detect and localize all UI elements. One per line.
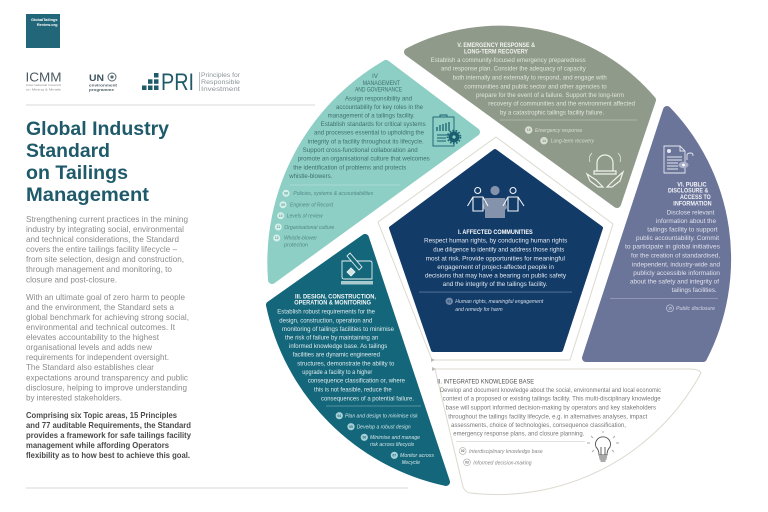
panel: III design, construction, operation and monitoring: upgrade a facility to a higher xyxy=(302,370,372,376)
icon: document with eye xyxy=(664,146,693,173)
intro paragraph 2: With an ultimate goal of zero harm to people xyxy=(26,293,185,302)
principle 01: and remedy for harm xyxy=(455,307,503,313)
panel: III design, construction, operation and monitoring xyxy=(270,238,446,482)
principle 15: Public disclosure xyxy=(676,306,715,312)
panel: IV management and governance: integrity of a facility throughout its lifecycle. xyxy=(308,139,424,145)
title: Global Industry xyxy=(26,118,169,140)
panel: III design, construction, operation and monitoring: design, construction, operation and xyxy=(279,318,372,324)
logo: UN environment programme: environment xyxy=(89,84,118,88)
intro paragraph 2 xyxy=(26,293,189,402)
panel: VI public disclosure and access to information: about the safety and integrity of xyxy=(630,280,719,286)
logo: UN environment programme: UN xyxy=(89,73,104,84)
intro paragraph 2: expectations around transparency and public xyxy=(26,373,188,382)
intro paragraph 2: The Standard also establishes clear xyxy=(26,363,154,372)
principle 11 xyxy=(275,224,334,231)
principle 13: 13 xyxy=(527,128,531,132)
panel: II integrated knowledge base: emergency response plans, and closure planning. xyxy=(453,432,585,438)
intro paragraph 1: covers the entire tailings facility lifecycle – xyxy=(26,245,177,254)
panel: IV management and governance: Assign responsibility and xyxy=(345,96,412,102)
panel: VI public disclosure and access to information: ACCESS TO xyxy=(680,195,711,201)
panel: II integrated knowledge base: throughout the tailings facility lifecycle, e.g. in alternatives analyses, impact xyxy=(448,414,648,420)
panel: II integrated knowledge base: base will support informed decision-making by operators and key stakeholders xyxy=(446,405,656,411)
principle 14 xyxy=(540,137,594,145)
panel: II integrated knowledge base xyxy=(432,367,701,495)
icon: alarm bell in hands xyxy=(587,153,623,187)
intro paragraph 3 (bold): and 77 auditable Requirements, the Standard xyxy=(26,421,191,430)
principle 06: Minimise and manage xyxy=(370,435,420,441)
icon: light bulb xyxy=(587,431,619,461)
panel: I affected communities: I. AFFECTED COMMUNITIES xyxy=(458,230,533,236)
panel: VI public disclosure and access to information: Disclose relevant xyxy=(667,210,715,216)
panel: III design, construction, operation and monitoring: consequences of a potential failure. xyxy=(321,396,414,402)
logo: Global Tailings Review xyxy=(26,14,60,48)
panel: I affected communities: decisions that may have a bearing on public safety xyxy=(425,273,566,279)
title: on Tailings xyxy=(26,162,128,184)
panel: IV management and governance: and processes essential to upholding the xyxy=(314,131,425,137)
logo: ICMM: International Council xyxy=(26,83,61,87)
principle 13 xyxy=(525,126,582,134)
principle 07: Monitor across xyxy=(400,453,434,459)
logo: ICMM: ICMM xyxy=(26,70,62,84)
principle 03: Informed decision-making xyxy=(473,460,532,466)
panel: I affected communities: most at risk. Provide opportunities for meaningful xyxy=(426,256,565,262)
panel: V emergency response and long-term recovery: both internally and externally to respond, and engage with xyxy=(453,75,607,81)
panel: IV management and governance: whistle-blowers. xyxy=(288,174,333,180)
logo: PRI: PRI xyxy=(161,69,194,96)
intro paragraph 1: and technical considerations, the Standard xyxy=(26,235,179,244)
intro paragraph 3 (bold): management while affording Operators xyxy=(26,441,169,450)
panel: VI public disclosure and access to information: to participate in global initiatives xyxy=(625,245,720,251)
panel: II integrated knowledge base: context of a proposed or existing tailings facility. This multi-disciplinary knowledge xyxy=(443,397,661,403)
panel: V emergency response and long-term recovery xyxy=(408,30,652,204)
principle 09: Engineer of Record xyxy=(290,203,334,209)
principle 01: Human rights, meaningful engagement xyxy=(455,299,544,305)
principle 08: 08 xyxy=(284,192,288,196)
principle 01: 01 xyxy=(448,300,451,304)
principle 06: risk across lifecycle xyxy=(370,442,414,448)
intro paragraph 2: and the environment, the Standard sets a xyxy=(26,303,174,312)
panel: III design, construction, operation and monitoring: consequence classification or, where xyxy=(308,379,406,385)
principle 03: 03 xyxy=(465,460,469,464)
principle 06 xyxy=(361,434,420,448)
principle 06: 06 xyxy=(363,436,366,440)
icon: three people xyxy=(468,186,524,218)
principle 04: 04 xyxy=(338,414,341,418)
principle 12: Whistle-blower xyxy=(284,236,317,242)
icon: clipboard with chart and gear xyxy=(433,115,460,146)
principle 11: 11 xyxy=(277,225,280,229)
panel: VI public disclosure and access to information: independent, industry-wide and xyxy=(632,262,720,268)
panel: V emergency response and long-term recovery: communities and public sector and other agencies to xyxy=(464,84,607,90)
principle 12: protection xyxy=(283,243,308,249)
panel: V emergency response and long-term recovery: V. EMERGENCY RESPONSE & xyxy=(457,43,536,49)
panel: V emergency response and long-term recovery: and response plan. Consider the adequacy of capacity xyxy=(441,67,586,73)
principle 15: 15 xyxy=(668,306,672,310)
principle 07: lifecycle xyxy=(402,460,420,466)
intro paragraph 1: closure and post-closure. xyxy=(26,275,117,284)
intro paragraph 3 (bold): provides a framework for safe tailings facility xyxy=(26,431,191,440)
panel: I affected communities: and the integrity of the tailings facility. xyxy=(443,282,548,288)
panel: III design, construction, operation and monitoring: the risk of failure by maintaining an xyxy=(285,335,378,341)
intro paragraph 2: elevates accountability to the highest xyxy=(26,333,160,342)
panel: VI public disclosure and access to information: DISCLOSURE & xyxy=(668,189,709,195)
principle 11: Organisational culture xyxy=(284,225,334,231)
intro paragraph 3 (bold) xyxy=(26,411,191,460)
principle 07: 07 xyxy=(393,454,396,458)
intro paragraph 2: organisational levels and adds new xyxy=(26,343,152,352)
panel: IV management and governance: Establish standards for critical systems xyxy=(321,122,426,128)
panel: V emergency response and long-term recovery: LONG-TERM RECOVERY xyxy=(464,50,528,56)
intro paragraph 2: requirements for independent oversight. xyxy=(26,353,169,362)
logo: PRI: Principles for xyxy=(201,72,240,79)
principle 03 xyxy=(464,459,532,466)
principle 09 xyxy=(280,201,334,209)
panel: IV management and governance: promote an organisational culture that welcomes xyxy=(298,157,430,163)
principle 05: 05 xyxy=(349,425,353,429)
principle 04: Plan and design to minimise risk xyxy=(345,414,418,420)
principle 08: Policies, systems & accountabilities xyxy=(293,191,374,197)
logo: PRI: Responsible xyxy=(201,79,241,86)
panel: V emergency response and long-term recovery: prepare for the event of a failure. Support the long-term xyxy=(476,93,624,99)
panel: I affected communities xyxy=(391,151,601,350)
principle 14: 14 xyxy=(542,139,546,143)
principle 02: 02 xyxy=(461,449,465,453)
logo: Global Tailings Review: Review.org xyxy=(37,22,58,27)
logo: UN environment programme xyxy=(89,73,118,92)
principle 10: Levels of review xyxy=(287,214,324,220)
principle 14: Long-term recovery xyxy=(551,139,594,145)
panel: IV management and governance: IV xyxy=(372,74,378,80)
panel: VI public disclosure and access to information: tailings facility to support xyxy=(647,228,718,234)
logo: ICMM xyxy=(26,70,62,92)
panel: IV management and governance: AND GOVERNANCE xyxy=(355,87,402,93)
intro paragraph 1 xyxy=(26,215,188,284)
panel: III design, construction, operation and monitoring: monitoring of tailings facilities to minimise xyxy=(282,327,395,333)
logo: Global Tailings Review: GlobalTailings xyxy=(31,17,58,22)
panel: V emergency response and long-term recovery: Establish a community-focused emergency preparedness xyxy=(431,58,586,64)
intro paragraph 2: disclosure, helping to improve understanding xyxy=(26,383,187,392)
panel: III design, construction, operation and monitoring: this is not feasible, reduce the xyxy=(314,387,392,393)
principle 12: 12 xyxy=(275,236,279,240)
panel: V emergency response and long-term recovery: recovery of communities and the environment affected xyxy=(488,102,635,108)
intro paragraph 3 (bold): Comprising six Topic areas, 15 Principles xyxy=(26,411,177,420)
panel: III design, construction, operation and monitoring: III. DESIGN, CONSTRUCTION, xyxy=(295,294,376,300)
panel: II integrated knowledge base: Develop and document knowledge about the social, environmental and local economic xyxy=(440,388,661,394)
principle 09: 09 xyxy=(281,203,285,207)
title: Management xyxy=(26,184,150,206)
panel: VI public disclosure and access to information xyxy=(586,110,727,358)
panel: VI public disclosure and access to information: tailings facilities. xyxy=(672,288,717,294)
panel: VI public disclosure and access to information: VI. PUBLIC xyxy=(677,183,707,189)
panel: V emergency response and long-term recovery: by a catastrophic tailings facility failure. xyxy=(500,110,604,116)
icon: blueprint and pencil xyxy=(341,253,373,284)
principle 01 xyxy=(446,298,544,313)
intro paragraph 2: environmental and technical outcomes. It xyxy=(26,323,176,332)
panel: IV management and governance: management of a tailings facility. xyxy=(328,114,415,120)
logo: UN environment programme: programme xyxy=(89,88,114,92)
panel: I affected communities: due diligence to identify and address those rights xyxy=(433,248,564,254)
panel: IV management and governance: Support cross-functional collaboration and xyxy=(303,148,418,154)
panel: III design, construction, operation and monitoring: facilities are dynamic engineered xyxy=(293,353,380,359)
principle 10: 10 xyxy=(279,214,283,218)
panel: II integrated knowledge base: II. INTEGRATED KNOWLEDGE BASE xyxy=(437,380,534,386)
intro paragraph 1: Strengthening current practices in the mining xyxy=(26,215,188,224)
panel: III design, construction, operation and monitoring: informed knowledge base. As tailings xyxy=(289,344,387,350)
intro paragraph 2: by interested stakeholders. xyxy=(26,393,122,402)
logo: ICMM: on Mining & Metals xyxy=(26,88,62,92)
panel: VI public disclosure and access to information: public accountability. Commit xyxy=(636,236,719,242)
title: Standard xyxy=(26,140,110,162)
panel: I affected communities: engagement of project-affected people in xyxy=(437,265,554,271)
principle 10 xyxy=(277,212,324,220)
principle 05: Develop a robust design xyxy=(357,425,411,431)
panel: III design, construction, operation and monitoring: OPERATION & MONITORING xyxy=(294,301,371,307)
principle 02: Interdisciplinary knowledge base xyxy=(469,449,543,455)
title xyxy=(26,118,169,206)
principle 12 xyxy=(273,234,317,249)
pentagon outline around panel I xyxy=(378,137,613,362)
principle 07 xyxy=(391,452,434,466)
panel: VI public disclosure and access to information: publicly accessible information xyxy=(633,271,720,277)
panel: I affected communities: Respect human rights, by conducting human rights xyxy=(424,239,567,245)
panel: III design, construction, operation and monitoring: Establish robust requirements for the xyxy=(277,310,376,316)
intro paragraph 2: global benchmark for achieving strong social, xyxy=(26,313,189,322)
logo: PRI: Investment xyxy=(201,86,240,93)
principle 13: Emergency response xyxy=(535,128,582,134)
intro paragraph 1: from site selection, design and construction, xyxy=(26,255,184,264)
panel: IV management and governance xyxy=(271,64,476,280)
panel: II integrated knowledge base: assessments, choice of technologies, consequence classification, xyxy=(451,423,626,429)
intro paragraph 1: through management and monitoring, to xyxy=(26,265,172,274)
panel: IV management and governance: MANAGEMENT xyxy=(363,81,400,87)
panel: III design, construction, operation and monitoring: structures, demonstrate the ability to xyxy=(297,361,395,367)
intro paragraph 3 (bold): flexibility as to how best to achieve this goal. xyxy=(26,451,190,460)
intro paragraph 1: industry by integrating social, environmental xyxy=(26,225,184,234)
logo: PRI xyxy=(142,69,241,96)
principle 15 xyxy=(666,305,715,312)
panel: VI public disclosure and access to information: for the creation of standardised, xyxy=(631,254,720,260)
panel: VI public disclosure and access to information: INFORMATION xyxy=(673,201,712,207)
panel: IV management and governance: accountability for key roles in the xyxy=(336,105,424,111)
panel: VI public disclosure and access to information: information about the xyxy=(656,219,717,225)
principle 05 xyxy=(347,423,411,431)
panel: IV management and governance: the identification of problems and protects xyxy=(293,165,406,171)
